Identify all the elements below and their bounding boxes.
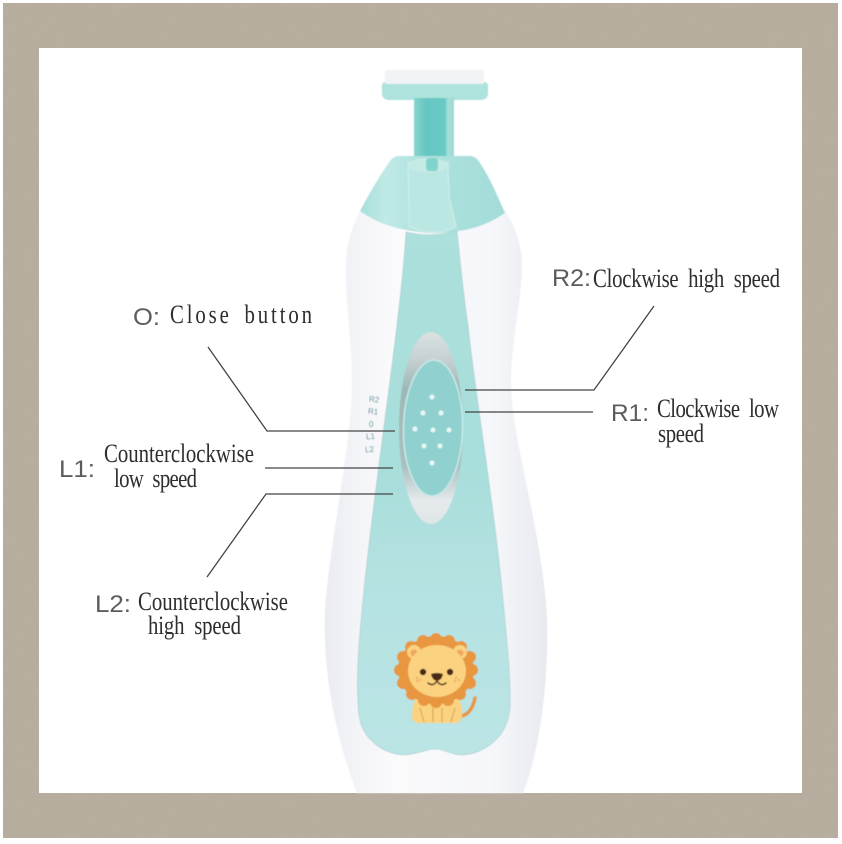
label: R1 clockwise low speed: speed (658, 420, 704, 449)
neck opening (408, 158, 448, 172)
label: L1 counterclockwise low speed: low speed (114, 465, 197, 494)
lion ears (407, 645, 467, 659)
button dots (412, 394, 452, 466)
label: L2 counterclockwise high speed: high speed (148, 612, 241, 641)
label: R1 clockwise low speed (611, 395, 779, 449)
label: L1 counterclockwise low speed: Counterclockwise (104, 440, 254, 469)
lion face (408, 645, 466, 697)
teal front panel (357, 231, 510, 755)
lion legs (420, 708, 455, 722)
slider recess (399, 332, 463, 524)
label: R2 clockwise high speed: R2: (552, 265, 591, 292)
label: R2 clockwise high speed: Clockwise high speed (593, 265, 780, 294)
trimmer head disc (382, 70, 488, 100)
white inner panel (39, 48, 802, 793)
switch position labels: L2 (365, 445, 375, 454)
product: nail trimmer (325, 70, 547, 793)
switch position labels: R1 (368, 406, 379, 417)
label: R1 clockwise low speed: R1: (611, 400, 649, 427)
leader: R1 (465, 411, 593, 413)
leader: L1 (265, 467, 393, 469)
switch position labels: L1 (366, 432, 376, 441)
trimmer stem (414, 98, 454, 158)
leader: R2 (465, 306, 654, 390)
label: L2 counterclockwise high speed: Counterclockwise (138, 588, 288, 617)
teal top cap (360, 156, 505, 233)
callout lines (207, 306, 654, 577)
lion features (416, 669, 460, 685)
lion tail (462, 698, 475, 716)
label: L1 counterclockwise low speed: L1: (59, 456, 95, 483)
label: O close button: O: (133, 304, 160, 331)
label: R1 clockwise low speed: Clockwise low (657, 395, 779, 424)
label: O close button: Close button (170, 301, 312, 330)
icon: lion (394, 633, 478, 723)
leader: close button (208, 347, 395, 431)
cap neck (408, 162, 456, 232)
slider button (402, 359, 464, 497)
switch position labels: 0 (369, 420, 374, 429)
switch position labels (365, 394, 380, 454)
label: L2 counterclockwise high speed: L2: (95, 591, 131, 618)
white handle body (325, 208, 547, 793)
leader: L2 (207, 494, 393, 577)
lion mane (394, 633, 478, 708)
label: L1 counterclockwise low speed (59, 440, 254, 494)
lion body (412, 694, 462, 723)
label: L2 counterclockwise high speed (95, 588, 288, 641)
switch position labels: R2 (369, 394, 380, 405)
